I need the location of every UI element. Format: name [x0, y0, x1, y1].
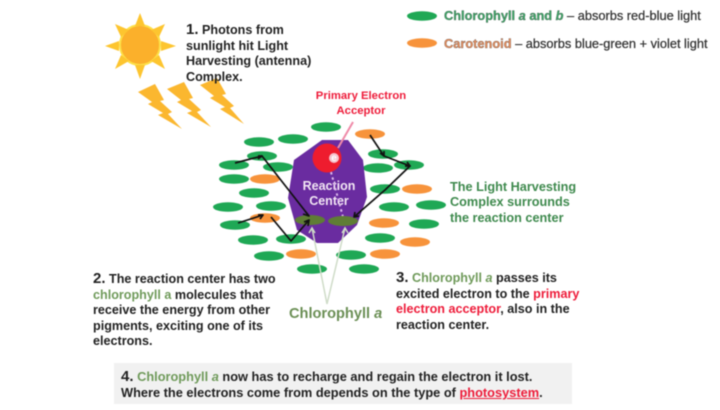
electron path dotted arrow — [331, 172, 343, 217]
step 1 text — [186, 21, 312, 84]
primary electron acceptor — [312, 144, 342, 172]
light harvesting complex label: Complex surrounds — [450, 195, 570, 209]
primary electron acceptor label — [316, 90, 406, 118]
step 3 text: excited electron to the primary — [396, 287, 579, 301]
step 3 text: 3. Chlorophyll a passes its — [396, 269, 557, 286]
step 2 text: 2. The reaction center has two — [93, 270, 276, 287]
pigment molecules: carotenoids — [250, 129, 432, 259]
step 3 text: electron acceptor, also in the — [396, 302, 570, 316]
step 3 text — [396, 269, 580, 332]
step 2 text: chlorophyll a molecules that — [93, 288, 263, 302]
primary electron acceptor label: Primary Electron — [316, 90, 406, 102]
legend: chlorophyll: Chlorophyll a and b – absorbs red-blue light — [444, 8, 701, 23]
light harvesting complex label: the reaction center — [450, 211, 564, 225]
step 2 text: electrons. — [93, 334, 152, 348]
step 4 callout: Where the electrons come from depends on the type of photosystem. — [121, 385, 543, 400]
step 1 text: sunlight hit Light — [186, 39, 288, 53]
icon: sun — [105, 13, 176, 79]
step 1 text: Complex. — [186, 70, 243, 84]
primary electron acceptor: e — [331, 153, 337, 164]
legend: carotenoid: Carotenoid – absorbs blue-green + violet light — [444, 36, 708, 51]
step 2 text: receive the energy from other — [93, 303, 270, 317]
step 3 text: reaction center. — [396, 318, 489, 332]
step 1 text: Harvesting (antenna) — [186, 54, 311, 68]
energy transfer arrows right — [354, 135, 410, 217]
step 4 callout: 4. Chlorophyll a now has to recharge and regain the electron it lost. — [121, 368, 532, 385]
step 2 text: pigments, exciting one of its — [93, 319, 263, 333]
legend icon: carotenoid — [407, 38, 437, 48]
reaction center label: Reaction — [303, 179, 355, 193]
icon: lightning bolts — [138, 78, 244, 129]
pigment molecules: chlorophyll a and b — [213, 122, 446, 274]
chlorophyll a label: Chlorophyll a — [289, 306, 382, 322]
reaction center — [288, 140, 367, 243]
chlorophyll a pointer lines — [309, 228, 348, 304]
primary electron acceptor label: Acceptor — [337, 105, 385, 117]
reaction center label: Center — [309, 194, 349, 208]
acceptor pointer arrow — [338, 122, 353, 148]
reaction center chlorophyll a pair — [295, 215, 358, 226]
energy transfer arrows left lower — [238, 215, 309, 241]
step 1 text: 1. Photons from — [186, 21, 284, 38]
legend icon: chlorophyll — [407, 11, 437, 21]
light harvesting complex label: The Light Harvesting — [450, 180, 576, 194]
step 4 callout — [114, 363, 572, 404]
energy transfer arrows left upper — [235, 156, 309, 216]
light harvesting complex label — [449, 180, 576, 225]
step 2 text — [92, 270, 276, 348]
